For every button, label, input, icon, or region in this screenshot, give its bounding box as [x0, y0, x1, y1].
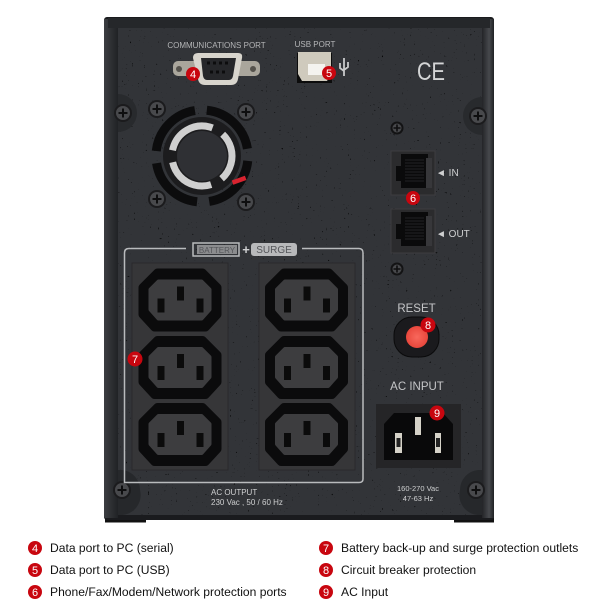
- legend item 8: Circuit breaker protection: [341, 563, 476, 577]
- marker 9: [430, 406, 444, 420]
- icon: USB symbol: [340, 58, 348, 76]
- left outlet block: [132, 263, 228, 470]
- legend item 9: AC Input: [341, 585, 389, 599]
- USB port: [297, 52, 332, 83]
- AC output label: AC OUTPUT: [211, 488, 257, 497]
- battery and surge badge: SURGE: [256, 245, 292, 256]
- marker 8: 8: [425, 320, 431, 332]
- CE mark: CE: [417, 58, 445, 86]
- legend item 9: [319, 585, 389, 599]
- serial port: [173, 53, 260, 85]
- AC output rating: 230 Vac , 50 / 60 Hz: [211, 498, 283, 507]
- legend: [28, 541, 578, 599]
- cooling fan: [148, 100, 255, 211]
- legend item 8: 8: [323, 565, 329, 577]
- output bracket line: [124, 248, 363, 482]
- battery and surge badge: BATTERY: [199, 246, 236, 255]
- marker 8: [420, 318, 436, 332]
- legend item 4: Data port to PC (serial): [50, 541, 174, 555]
- legend item 4: 4: [32, 543, 38, 555]
- legend item 6: Phone/Fax/Modem/Network protection ports: [50, 585, 287, 599]
- marker 5: [322, 66, 336, 80]
- battery and surge badge: [193, 242, 297, 257]
- right outlet block: [259, 263, 355, 470]
- marker 7: 7: [132, 354, 138, 366]
- UPS rear panel: [104, 17, 494, 522]
- side and corner screws: [113, 94, 487, 515]
- legend item 5: Data port to PC (USB): [50, 563, 170, 577]
- IN label: ◄ IN: [436, 168, 459, 179]
- AC input rating: 47-63 Hz: [403, 494, 433, 503]
- marker 9: 9: [434, 408, 440, 420]
- communications port label: COMMUNICATIONS PORT: [167, 41, 266, 50]
- marker 5: 5: [326, 68, 332, 80]
- marker 6: 6: [410, 193, 416, 205]
- AC input label: AC INPUT: [390, 381, 444, 393]
- AC input rating: 160-270 Vac: [397, 484, 439, 493]
- phone/network OUT jack: [391, 209, 435, 253]
- AC input rating: [397, 484, 439, 503]
- legend item 5: 5: [32, 565, 38, 577]
- legend item 9: 9: [323, 587, 329, 599]
- OUT label: ◄ OUT: [436, 229, 470, 240]
- marker 6: [406, 191, 420, 205]
- phone/network IN jack: [391, 151, 435, 195]
- reset label: RESET: [397, 303, 436, 315]
- chassis body: [104, 17, 494, 522]
- reset button: [394, 317, 439, 357]
- AC input socket: [376, 404, 461, 468]
- legend item 7: Battery back-up and surge protection outlets: [341, 541, 578, 555]
- USB port label: USB PORT: [295, 40, 335, 49]
- battery and surge badge: +: [242, 242, 250, 257]
- legend item 7: 7: [323, 543, 329, 555]
- marker 4: [186, 67, 200, 81]
- marker 4: 4: [190, 69, 196, 81]
- marker 7: [128, 352, 142, 366]
- legend item 6: 6: [32, 587, 38, 599]
